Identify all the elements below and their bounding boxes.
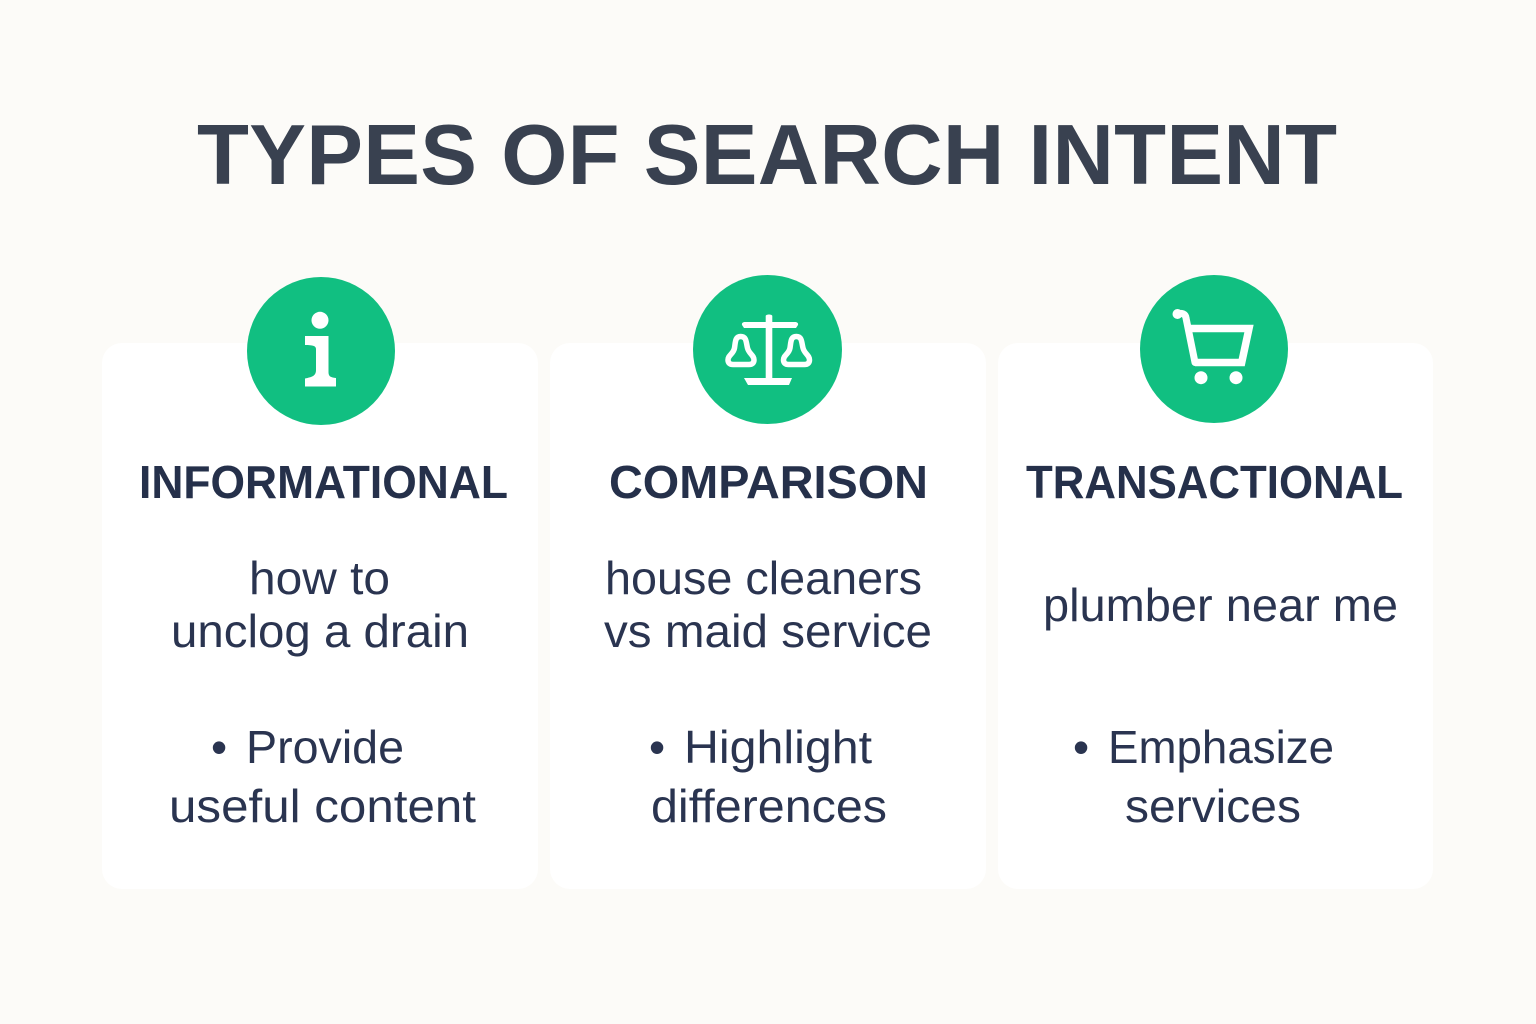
tip: informational: useful content: [169, 780, 476, 832]
icon: balance scale: [693, 275, 842, 424]
panel: informational: [102, 277, 538, 889]
tip: transactional: services: [1125, 780, 1301, 832]
tip: transactional: Emphasize: [1108, 721, 1334, 773]
heading: informational: INFORMATIONAL: [139, 456, 508, 508]
tip: comparison: •: [649, 721, 665, 773]
panel: comparison: [550, 275, 986, 889]
tip: transactional: •: [1073, 721, 1089, 773]
tip: comparison: differences: [651, 780, 887, 832]
tip: comparison: Highlight: [684, 721, 872, 773]
example query: comparison: vs maid service: [604, 605, 932, 657]
icon: information: [247, 277, 395, 425]
panel: transactional: [998, 275, 1433, 889]
heading: comparison: COMPARISON: [609, 456, 928, 508]
tip: informational: Provide: [246, 721, 404, 773]
icon: shopping cart: [1140, 275, 1288, 423]
example query: informational: unclog a drain: [171, 605, 469, 657]
heading: transactional: TRANSACTIONAL: [1026, 456, 1403, 508]
example query: comparison: house cleaners: [605, 552, 922, 604]
example query: transactional: plumber near me: [1043, 579, 1398, 631]
tip: informational: •: [211, 721, 227, 773]
example query: informational: how to: [249, 552, 390, 604]
title: TYPES OF SEARCH INTENT: [197, 108, 1337, 203]
